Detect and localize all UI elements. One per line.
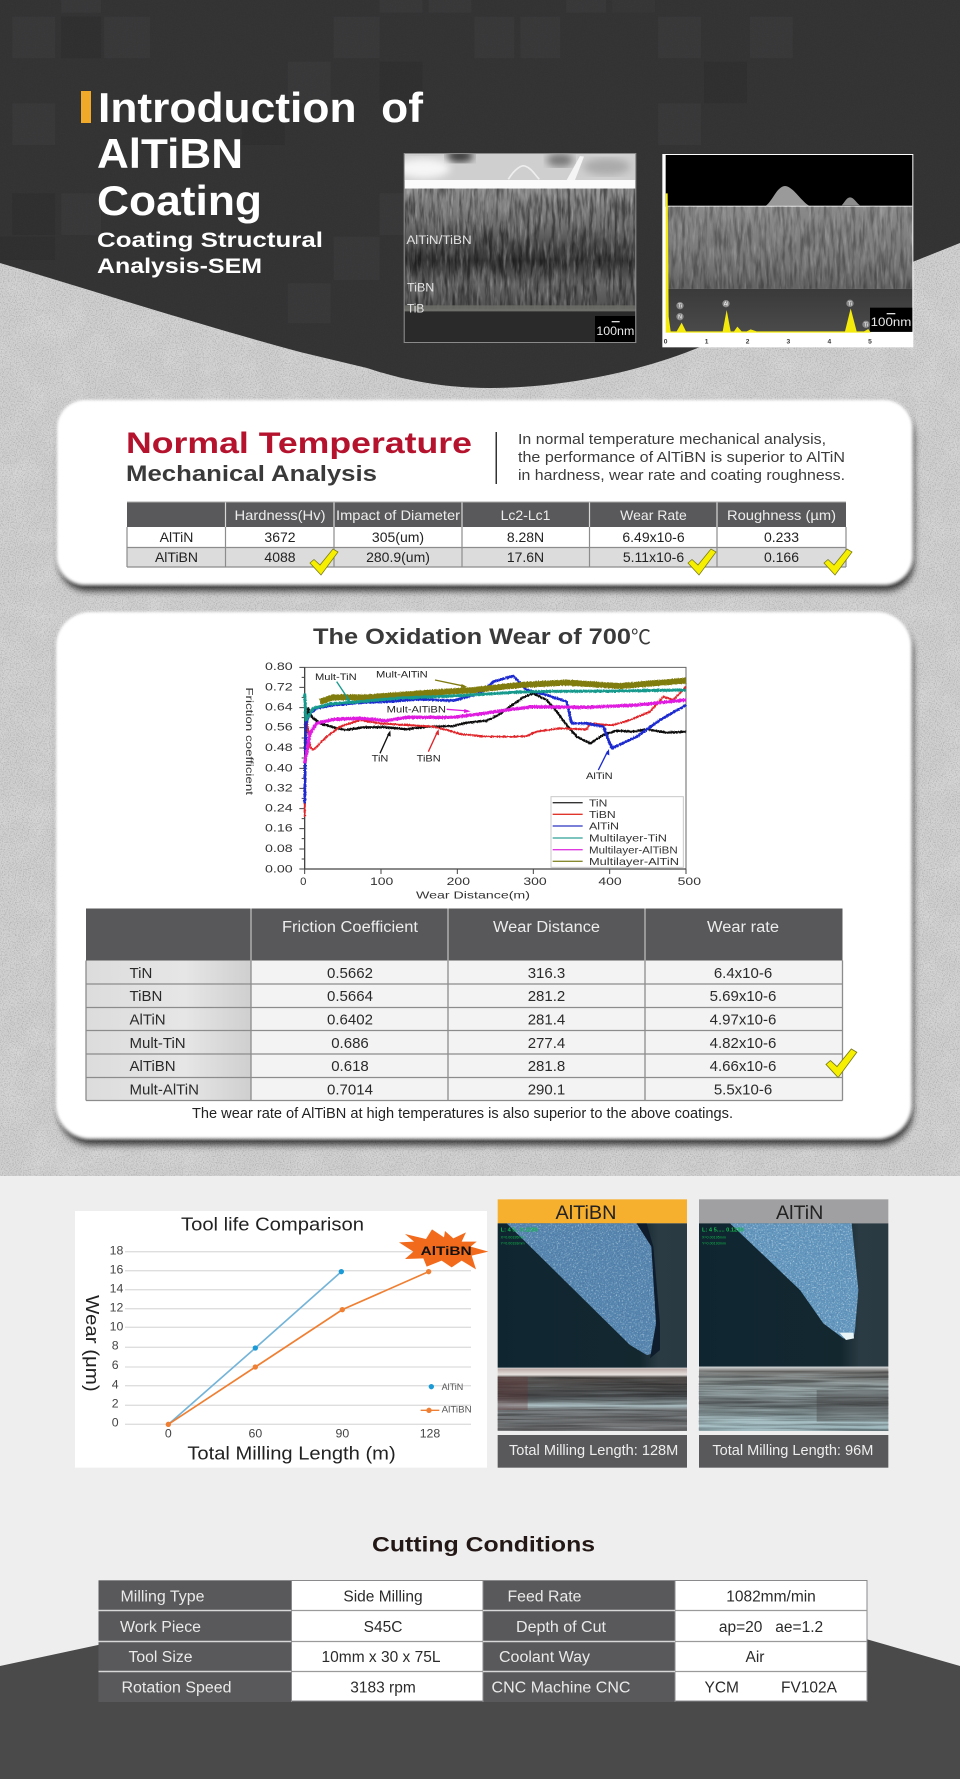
y axis labels: 6	[112, 1358, 119, 1372]
y axis labels: 8	[112, 1339, 119, 1353]
scale bar: 100nm	[596, 324, 634, 338]
curve callouts: Mult-TiN	[315, 672, 357, 682]
table: oxidation wear results: AlTiBN	[130, 1058, 176, 1075]
axis tick labels: 0.56	[265, 722, 293, 734]
table: oxidation wear results: 5.5x10-6	[714, 1082, 772, 1098]
icon: check mark hardness	[310, 549, 338, 575]
tool tip photo: L: 4 5..... 0.1238	[702, 1228, 744, 1234]
table: cutting conditions: YCM	[704, 1680, 739, 1696]
milled surface photo	[498, 1368, 687, 1431]
table: oxidation wear results: 0.686	[331, 1035, 369, 1052]
series: AlTiBN	[166, 1269, 431, 1427]
table: mechanical properties: 17.6N	[507, 549, 544, 565]
table: oxidation wear results: 0.6402	[327, 1012, 373, 1028]
table: cutting conditions: Rotation Speed	[122, 1680, 232, 1696]
table: oxidation wear results: Friction Coefficient	[282, 919, 419, 936]
table: cutting conditions: Work Piece	[120, 1619, 201, 1636]
axis tick labels: 0.08	[265, 843, 293, 855]
y axis labels: 4	[112, 1377, 119, 1391]
table: cutting conditions: 1082mm/min	[726, 1588, 816, 1606]
axis tick labels: 0.48	[265, 742, 293, 754]
description: in hardness, wear rate and coating roughness.	[518, 467, 845, 484]
table: cutting conditions: 10mm x 30 x 75L	[322, 1649, 441, 1666]
title	[97, 84, 424, 224]
x axis labels: 0	[165, 1426, 172, 1440]
title accent bar	[81, 91, 91, 123]
axis tick labels	[265, 661, 293, 875]
element markers: N	[678, 315, 682, 321]
title: Introduction of	[98, 84, 424, 131]
background: lower light band	[0, 1176, 960, 1779]
line chart: friction coefficient vs wear distance: 0	[300, 876, 306, 888]
table note: The wear rate of AlTiBN at high temperatures is also superior to the above coatings.	[192, 1105, 733, 1122]
axis tick labels: 0.64	[265, 702, 293, 714]
panel background	[56, 612, 911, 1138]
element markers: Al	[724, 302, 728, 308]
table: oxidation wear results: 281.2	[528, 988, 565, 1005]
table: cutting conditions: ap=20 ae=1.2	[719, 1619, 823, 1636]
legend: AlTiN	[442, 1382, 463, 1392]
panel: normal temperature mechanical analysis	[57, 400, 912, 584]
y axis labels: 16	[110, 1263, 123, 1277]
table: oxidation wear results: TiN	[130, 965, 152, 982]
caption: Total Milling Length: 96M	[712, 1443, 873, 1459]
legend: TiBN	[589, 810, 616, 821]
table: cutting conditions: Coolant Way	[499, 1649, 590, 1666]
curve callouts: Mult-AlTiN	[376, 669, 428, 679]
heading	[126, 427, 472, 486]
scale bar: 100nm	[871, 315, 911, 329]
table: cutting conditions: Feed Rate	[508, 1588, 582, 1606]
SEM image: AlTiN/TiBN cross section	[397, 150, 636, 343]
chart background	[75, 1211, 487, 1468]
axis tick labels: 0.16	[265, 823, 293, 835]
y axis labels	[110, 1244, 123, 1429]
table: cutting conditions: Side Milling	[343, 1588, 423, 1606]
table: mechanical properties: Impact of Diameter	[336, 507, 460, 523]
header dark wave	[0, 0, 960, 388]
energy axis labels: 1	[705, 338, 709, 345]
table: mechanical properties: Roughness (µm)	[727, 507, 836, 523]
table: cutting conditions: S45C	[364, 1619, 402, 1636]
tool tip photo	[498, 1223, 687, 1368]
energy axis labels: 3	[786, 338, 790, 345]
table: oxidation wear results: Mult-TiN	[130, 1035, 186, 1052]
tool tip photo: L: 4 5.. 0.1238	[501, 1228, 537, 1234]
y axis labels: 12	[110, 1301, 123, 1315]
element markers: Ti	[864, 322, 868, 328]
table: mechanical properties: 4088	[264, 549, 296, 565]
table: cutting conditions: Depth of Cut	[516, 1619, 607, 1636]
axis tick labels: 0.24	[265, 803, 293, 815]
card header	[498, 1199, 687, 1223]
energy axis labels: 2	[746, 338, 750, 345]
photo card: AlTiN	[699, 1199, 888, 1468]
table: oxidation wear results: TiBN	[130, 988, 162, 1005]
axis tick labels: 0.72	[265, 681, 293, 693]
table: mechanical properties	[127, 502, 846, 567]
photo card: AlTiBN: AlTiBN	[555, 1203, 616, 1224]
tool tip photo	[699, 1223, 888, 1367]
heading: The Oxidation Wear of 700	[313, 624, 631, 649]
legend: AlTiN	[589, 822, 619, 833]
icon: check mark wear rate	[688, 549, 716, 575]
table: cutting conditions: 3183 rpm	[350, 1680, 416, 1696]
energy axis labels: 4	[827, 338, 831, 345]
table: mechanical properties: Lc2-Lc1	[501, 507, 551, 523]
table: mechanical properties: 8.28N	[507, 529, 544, 545]
table: cutting conditions: CNC Machine CNC	[492, 1680, 630, 1696]
line chart: friction coefficient vs wear distance: 100	[370, 876, 393, 888]
scale bar	[870, 308, 912, 332]
curve callouts	[315, 669, 613, 781]
layer labels	[406, 233, 472, 316]
line chart: friction coefficient vs wear distance: 500	[678, 876, 701, 888]
data curves	[305, 676, 686, 817]
divider	[496, 432, 497, 484]
tool tip photo: Y=0.00193mm	[702, 1242, 726, 1246]
element markers: Ti	[678, 304, 682, 310]
table: oxidation wear results: Wear rate	[707, 919, 779, 936]
heading: cutting conditions: Cutting Conditions	[372, 1534, 595, 1556]
axis titles: Total Milling Length (m)	[187, 1442, 396, 1463]
table: cutting conditions	[98, 1580, 867, 1702]
table: cutting conditions: FV102A	[781, 1680, 838, 1696]
x axis labels: 90	[335, 1426, 349, 1440]
caption: Total Milling Length: 128M	[509, 1443, 678, 1459]
starburst badge: AlTiBN	[399, 1229, 488, 1269]
table: oxidation wear results: 0.618	[331, 1058, 369, 1075]
subtitle	[97, 229, 323, 278]
axis tick labels: 0.80	[265, 661, 293, 673]
x axis labels: 128	[420, 1426, 440, 1440]
table: oxidation wear results: 277.4	[528, 1035, 565, 1052]
table: cutting conditions: Tool Size	[128, 1649, 192, 1666]
heading: Mechanical Analysis	[126, 461, 377, 486]
legend: AlTiBN	[442, 1404, 472, 1414]
subtitle: Analysis-SEM	[97, 255, 262, 278]
y axis labels: 0	[112, 1415, 119, 1429]
SEM image: EDS spectrum overlay	[662, 154, 913, 347]
table: oxidation wear results: 0.5664	[327, 988, 373, 1005]
table: oxidation wear results: 4.82x10-6	[710, 1035, 776, 1052]
layer labels: TiB	[407, 302, 424, 316]
tool tip photo: X=0.00195mm	[501, 1236, 525, 1240]
table: mechanical properties: Wear Rate	[620, 507, 687, 523]
curve callouts: TiN	[372, 754, 388, 764]
x axis labels	[165, 1426, 440, 1440]
table: oxidation wear results: 0.7014	[327, 1082, 373, 1098]
legend: Multilayer-AlTiN	[589, 857, 679, 868]
table: cutting conditions: Milling Type	[120, 1588, 204, 1606]
title: Coating	[97, 177, 262, 224]
description: In normal temperature mechanical analysis,	[518, 431, 826, 448]
table: oxidation wear results: Mult-AlTiN	[130, 1082, 199, 1098]
line chart: tool life comparison: Wear (μm)	[82, 1295, 103, 1392]
table: cutting conditions: Air	[746, 1649, 764, 1666]
y axis labels: 18	[110, 1244, 123, 1258]
chart title: Tool life Comparison	[181, 1214, 364, 1235]
tool tip photo: X=0.00195mm	[702, 1236, 726, 1240]
element markers: Ti	[848, 301, 852, 307]
legend: Multilayer-AlTiBN	[589, 845, 678, 856]
description: the performance of AlTiBN is superior to AlTiN	[518, 449, 845, 466]
subtitle: Coating Structural	[97, 229, 323, 252]
table: mechanical properties: 6.49x10-6	[622, 529, 685, 545]
axis titles: Wear Distance(m)	[416, 890, 530, 901]
table: mechanical properties: 5.11x10-6	[623, 549, 684, 565]
legend	[421, 1382, 472, 1414]
photo card: AlTiBN	[498, 1199, 687, 1468]
axis tick labels: 0.40	[265, 762, 293, 774]
energy axis labels	[664, 338, 872, 345]
scale bar	[595, 316, 635, 342]
legend: TiN	[589, 798, 607, 809]
description	[518, 431, 845, 484]
table: mechanical properties: 280.9(um)	[366, 549, 430, 565]
energy axis labels: 0	[664, 338, 668, 345]
gridlines	[125, 1252, 471, 1424]
table: oxidation wear results: 290.1	[528, 1082, 565, 1098]
table: oxidation wear results: AlTiN	[130, 1012, 166, 1028]
axis tick labels: 0.32	[265, 782, 293, 794]
table: mechanical properties: 305(um)	[372, 529, 424, 545]
energy axis labels: 5	[868, 338, 872, 345]
starburst badge: AlTiBN: AlTiBN	[421, 1244, 472, 1258]
table: oxidation wear results: 4.66x10-6	[710, 1058, 776, 1075]
table: oxidation wear results: 281.4	[528, 1012, 565, 1028]
card header	[699, 1199, 888, 1223]
curve callouts: AlTiN	[586, 771, 613, 781]
layer labels: TiBN	[407, 281, 434, 295]
panel background	[57, 400, 912, 584]
table: oxidation wear results: 316.3	[528, 965, 565, 982]
table: oxidation wear results: 4.97x10-6	[710, 1012, 776, 1028]
icon: check mark lowest wear rate	[826, 1049, 857, 1078]
series: AlTiN	[168, 1269, 344, 1424]
x axis labels: 60	[248, 1426, 262, 1440]
line chart: friction coefficient vs wear distance: 400	[598, 876, 622, 888]
y axis labels: 10	[110, 1320, 123, 1334]
line chart: friction coefficient vs wear distance: Friction coefficient	[243, 687, 254, 795]
line chart: friction coefficient vs wear distance: 200	[447, 876, 470, 888]
curve callouts: Mult-AlTiBN	[387, 705, 446, 715]
y axis labels: 2	[112, 1396, 119, 1410]
table: oxidation wear results: 281.8	[528, 1058, 565, 1075]
background: stone texture	[0, 0, 960, 1180]
table: oxidation wear results	[86, 908, 842, 1100]
table: oxidation wear results: 6.4x10-6	[714, 965, 772, 982]
table: oxidation wear results: 5.69x10-6	[710, 988, 776, 1005]
table: mechanical properties: AlTiN	[160, 529, 193, 545]
table: oxidation wear results: 0.5662	[327, 965, 373, 982]
table: oxidation wear results: Wear Distance	[493, 919, 600, 936]
heading: Normal Temperature	[126, 427, 472, 460]
tool tip photo: Y=0.00193mm	[501, 1242, 525, 1246]
caption	[699, 1435, 888, 1468]
plot frame and axes	[299, 667, 686, 874]
table: mechanical properties: 3672	[264, 529, 296, 545]
background: bottom dark band	[0, 1600, 960, 1779]
line chart: tool life comparison	[75, 1211, 488, 1468]
element markers	[676, 300, 870, 328]
table: mechanical properties: 0.233	[764, 529, 799, 545]
milled surface photo	[699, 1367, 888, 1431]
EDS spectrum peaks	[666, 193, 871, 333]
heading: ℃	[631, 621, 651, 650]
table: mechanical properties: AlTiBN	[155, 549, 198, 565]
table: mechanical properties: 0.166	[764, 549, 799, 565]
line chart: friction coefficient vs wear distance	[243, 661, 701, 901]
icon: check mark roughness	[824, 549, 852, 575]
panel: oxidation wear of 700C	[56, 612, 911, 1138]
title block	[81, 84, 424, 278]
legend	[551, 797, 683, 868]
line chart: friction coefficient vs wear distance: 300	[523, 876, 547, 888]
title: AlTiBN	[97, 130, 243, 177]
photo card: AlTiN: AlTiN	[776, 1203, 823, 1224]
caption	[498, 1435, 687, 1468]
table: mechanical properties: Hardness(Hv)	[234, 507, 326, 523]
legend: Multilayer-TiN	[589, 834, 667, 845]
axis tick labels: 0.00	[265, 863, 293, 875]
curve callouts: TiBN	[417, 754, 441, 764]
y axis labels: 14	[110, 1282, 123, 1296]
callout arrows	[337, 680, 608, 770]
layer labels: AlTiN/TiBN	[406, 233, 472, 247]
